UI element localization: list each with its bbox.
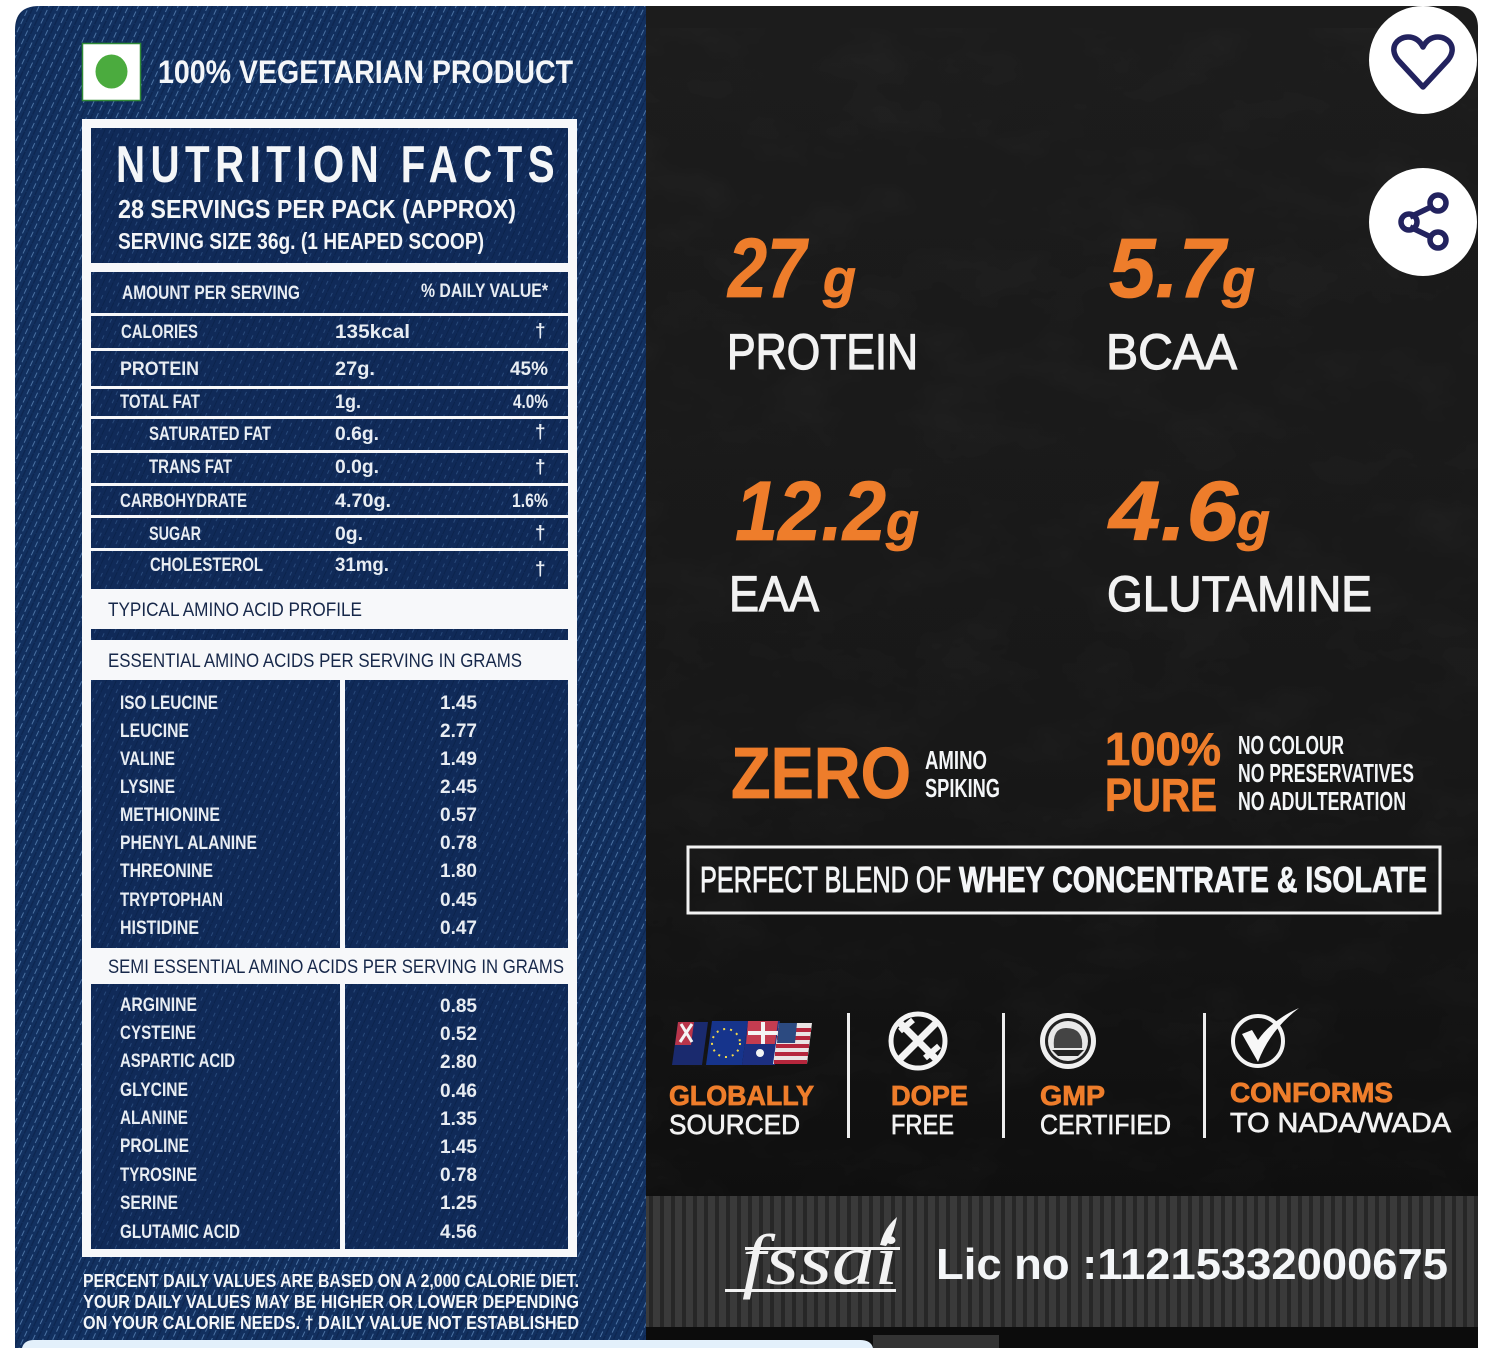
essential amino acids table: HISTIDINE	[120, 918, 199, 939]
semi essential amino acids table: CYSTEINE	[120, 1023, 196, 1044]
badge: GMP certified	[1040, 1013, 1171, 1140]
semi essential amino acids table: 4.56	[440, 1222, 477, 1243]
claim: 100% pure: NO ADULTERATION	[1238, 786, 1406, 816]
row: calories: †	[535, 321, 546, 342]
footnote text	[83, 1271, 579, 1333]
essential amino acids table: THREONINE	[120, 861, 213, 882]
stat: BCAA: g	[1221, 249, 1255, 309]
divider strip	[91, 629, 568, 640]
row: cholesterol: CHOLESTEROL	[150, 555, 263, 576]
semi essential amino acids table: PROLINE	[120, 1136, 189, 1157]
icon: country flags	[672, 1021, 812, 1065]
essential amino acids table: LYSINE	[120, 777, 175, 798]
heading: semi essential amino acids: SEMI ESSENTIAL AMINO ACIDS PER SERVING IN GRAMS	[108, 957, 564, 978]
footnote text: ON YOUR CALORIE NEEDS. † DAILY VALUE NOT ESTABLISHED	[83, 1313, 579, 1333]
row: carbohydrate: 4.70g.	[335, 491, 391, 512]
row: cholesterol	[91, 551, 568, 589]
logo: fssai: fssai	[742, 1220, 898, 1300]
badge: conforms to NADA/WADA: CONFORMS	[1230, 1077, 1393, 1108]
heading: essential amino acids: ESSENTIAL AMINO ACIDS PER SERVING IN GRAMS	[108, 651, 522, 672]
stat: EAA: 12.2	[735, 464, 886, 558]
stat: BCAA	[1106, 221, 1255, 380]
icon: no syringe	[891, 1014, 945, 1068]
stat: glutamine	[1107, 464, 1372, 622]
claim: 100% pure: NO COLOUR	[1238, 730, 1344, 760]
bottom overlay fragments	[22, 1335, 999, 1348]
stat: glutamine: GLUTAMINE	[1107, 566, 1372, 622]
row: protein: 27g.	[335, 359, 375, 380]
row: trans fat: †	[535, 457, 546, 478]
claim: 100% pure	[1105, 723, 1414, 821]
button: share	[1369, 168, 1477, 276]
row: cholesterol: 31mg.	[335, 555, 389, 576]
badge: dope free: FREE	[891, 1109, 954, 1140]
row: sugar: 0g.	[335, 524, 363, 545]
row: total fat: 4.0%	[513, 392, 548, 413]
semi essential amino acids table: 0.78	[440, 1165, 477, 1186]
essential amino acids table: VALINE	[120, 749, 175, 770]
amount per serving header row	[91, 272, 568, 313]
semi essential amino acids table: SERINE	[120, 1193, 178, 1214]
essential amino acids table	[91, 680, 568, 948]
dark panel chalk texture	[646, 28, 1478, 1196]
licence number: Lic no :11215332000675	[936, 1240, 1448, 1289]
row: sugar: †	[535, 523, 546, 544]
essential amino acids table: 0.45	[440, 890, 477, 911]
semi essential amino acids table: 1.35	[440, 1109, 477, 1130]
button: favourite	[1369, 6, 1477, 114]
stat: protein	[726, 221, 918, 380]
panel: fssai licence band	[646, 1196, 1478, 1327]
row: protein	[91, 351, 568, 386]
stat: EAA: EAA	[729, 566, 820, 622]
semi essential amino acids table: 2.80	[440, 1052, 477, 1073]
badge: globally sourced: SOURCED	[669, 1109, 800, 1140]
essential amino acids table: 0.47	[440, 918, 477, 939]
panel: nutrition denim background	[15, 6, 646, 1348]
badge: globally sourced: GLOBALLY	[669, 1080, 814, 1111]
essential amino acids table: 1.45	[440, 693, 477, 714]
row: carbohydrate	[91, 486, 568, 515]
footnote text: PERCENT DAILY VALUES ARE BASED ON A 2,000 CALORIE DIET.	[83, 1271, 579, 1291]
row: saturated fat: †	[535, 422, 546, 443]
essential amino acids table: 2.45	[440, 777, 477, 798]
badge: conforms to NADA/WADA: TO NADA/WADA	[1230, 1107, 1451, 1138]
semi essential amino acids table: 0.52	[440, 1024, 477, 1045]
stat: protein: 27	[726, 221, 809, 315]
row: saturated fat: 0.6g.	[335, 424, 379, 445]
row: protein: PROTEIN	[120, 359, 199, 380]
panel: nutrition facts table	[82, 119, 577, 1257]
semi essential amino acids table: 1.25	[440, 1193, 477, 1214]
semi essential amino acids table: TYROSINE	[120, 1165, 197, 1186]
claim: zero amino spiking: SPIKING	[925, 773, 1000, 803]
badge: dope free	[891, 1014, 968, 1140]
semi essential amino acids table: GLUTAMIC ACID	[120, 1222, 240, 1243]
nutrition header: NUTRITION FACTS	[116, 136, 560, 194]
panel: dark product claims background	[646, 6, 1478, 1348]
stat: protein: PROTEIN	[727, 324, 918, 380]
row: total fat: TOTAL FAT	[120, 392, 200, 413]
claim: 100% pure: PURE	[1105, 769, 1217, 821]
essential amino acids table: 0.78	[440, 833, 477, 854]
stat: protein: g	[822, 249, 856, 309]
icon: share nodes	[1401, 195, 1446, 248]
divider	[1002, 1013, 1005, 1138]
semi essential amino acids table: ALANINE	[120, 1108, 188, 1129]
row: carbohydrate: CARBOHYDRATE	[120, 491, 247, 512]
essential amino acids table: 2.77	[440, 721, 477, 742]
amount per serving header row: % DAILY VALUE*	[421, 281, 548, 302]
semi essential amino acids table: ASPARTIC ACID	[120, 1051, 235, 1072]
divider	[847, 1013, 850, 1138]
table frame	[82, 119, 577, 1257]
essential amino acids table: 1.49	[440, 749, 477, 770]
essential amino acids table: 1.80	[440, 861, 477, 882]
badge: dope free: DOPE	[891, 1080, 968, 1111]
vegetarian badge	[82, 44, 573, 100]
essential amino acids table: METHIONINE	[120, 805, 220, 826]
essential amino acids table: TRYPTOPHAN	[120, 890, 223, 911]
semi essential amino acids table: 0.46	[440, 1081, 477, 1102]
badge: globally sourced	[669, 1021, 814, 1140]
row: trans fat: TRANS FAT	[149, 457, 232, 478]
claim: zero amino spiking: ZERO	[731, 734, 911, 814]
icon: heart	[1394, 37, 1452, 87]
callout: perfect blend: PERFECT BLEND OF	[700, 859, 951, 900]
row: protein: 45%	[510, 359, 548, 380]
stat: EAA	[729, 464, 919, 622]
stat: BCAA: BCAA	[1106, 324, 1238, 380]
callout: perfect blend	[688, 847, 1440, 913]
semi essential amino acids table: 1.45	[440, 1137, 477, 1158]
badge: conforms to NADA/WADA	[1230, 1008, 1451, 1138]
essential amino acids table: 0.57	[440, 805, 477, 826]
badge: GMP certified: CERTIFIED	[1040, 1109, 1171, 1140]
row: saturated fat	[91, 419, 568, 450]
row: total fat: 1g.	[335, 392, 361, 413]
badge: GMP certified: GMP	[1040, 1080, 1105, 1111]
semi essential amino acids table: 0.85	[440, 996, 477, 1017]
heading: vegetarian product: 100% VEGETARIAN PRODUCT	[158, 54, 573, 90]
row: total fat	[91, 389, 568, 416]
nutrition header	[91, 128, 568, 263]
essential amino acids table: LEUCINE	[120, 721, 189, 742]
row: trans fat: 0.0g.	[335, 457, 379, 478]
claim: 100% pure: 100%	[1105, 723, 1221, 775]
claim: 100% pure: NO PRESERVATIVES	[1238, 758, 1414, 788]
icon: GMP seal	[1040, 1013, 1096, 1069]
row: trans fat	[91, 453, 568, 483]
amount per serving header row: AMOUNT PER SERVING	[122, 283, 300, 304]
row: calories: 135kcal	[335, 322, 410, 343]
claim: zero amino spiking: AMINO	[925, 745, 987, 775]
row: sugar: SUGAR	[149, 524, 201, 545]
row: calories	[91, 316, 568, 348]
semi essential amino acids table: GLYCINE	[120, 1080, 188, 1101]
icon: green veg mark	[82, 44, 140, 100]
divider	[1203, 1013, 1206, 1138]
row: calories: CALORIES	[121, 322, 198, 343]
nutrition header: SERVING SIZE 36g. (1 HEAPED SCOOP)	[118, 228, 484, 254]
stat: BCAA: 5.7	[1109, 221, 1228, 315]
icon: check mark	[1233, 1008, 1299, 1066]
stat: glutamine: 4.6	[1107, 464, 1239, 558]
stat: EAA: g	[885, 492, 919, 552]
row: sugar	[91, 518, 568, 548]
stat: glutamine: g	[1236, 492, 1270, 552]
row: cholesterol: †	[535, 559, 546, 580]
semi essential amino acids table	[91, 984, 568, 1249]
row: saturated fat: SATURATED FAT	[149, 424, 271, 445]
nutrition header: 28 SERVINGS PER PACK (APPROX)	[118, 194, 516, 224]
semi essential amino acids table: ARGININE	[120, 995, 197, 1016]
essential amino acids table: PHENYL ALANINE	[120, 833, 257, 854]
footnote text: YOUR DAILY VALUES MAY BE HIGHER OR LOWER DEPENDING	[83, 1292, 579, 1312]
heading: typical amino acid profile: TYPICAL AMINO ACID PROFILE	[108, 600, 362, 621]
row: carbohydrate: 1.6%	[512, 491, 548, 512]
essential amino acids table: ISO LEUCINE	[120, 693, 218, 714]
